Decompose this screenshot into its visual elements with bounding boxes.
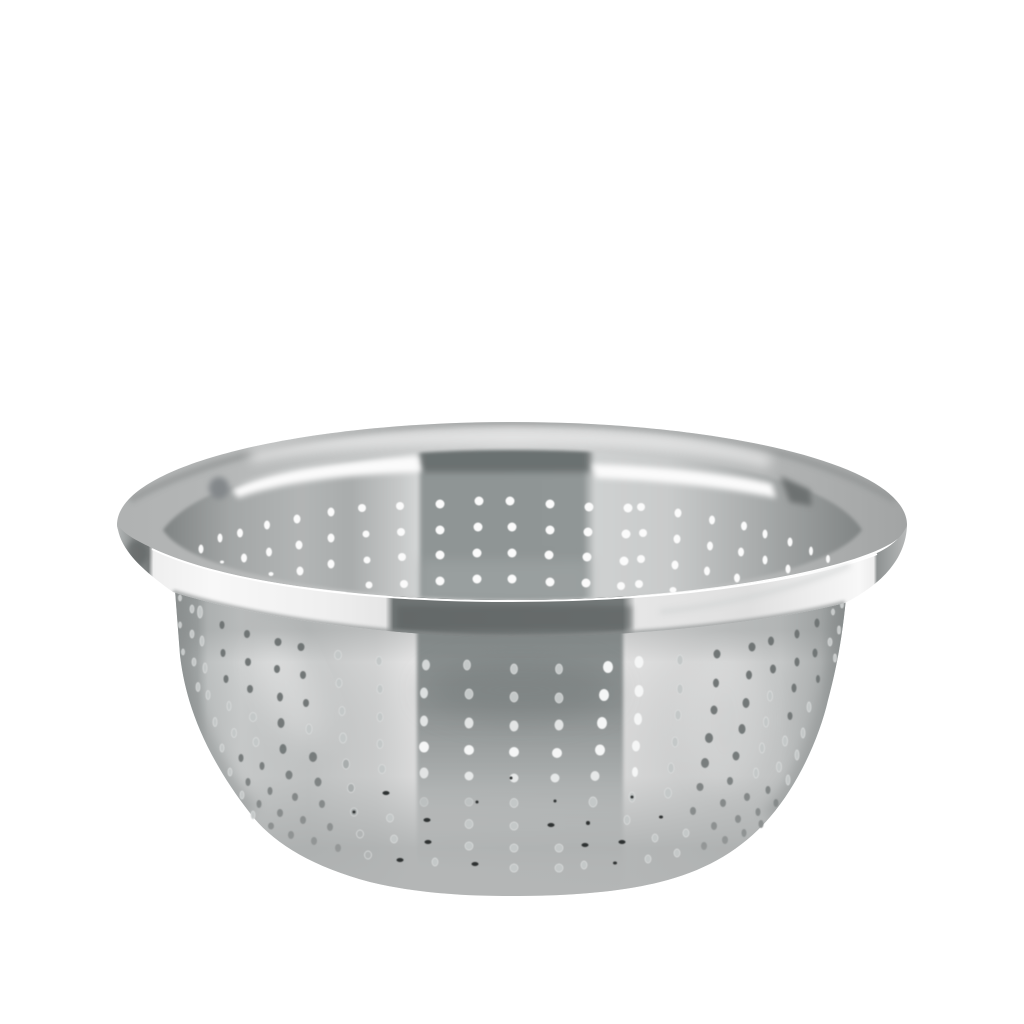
- front rim band: [117, 522, 907, 637]
- upper lip of the rim: [110, 418, 914, 608]
- interior perforations: [198, 496, 830, 593]
- body perforations: bright see-through holes: [419, 656, 644, 782]
- body perforations: dark see-through specks: [352, 776, 663, 866]
- product photo: stainless steel colander: [117, 422, 907, 896]
- basin interior: [155, 440, 870, 605]
- rim band reflections: [126, 539, 877, 637]
- lip highlights and shadows: [209, 456, 812, 506]
- bowl outer body: [170, 585, 850, 900]
- colander bowl: [110, 418, 914, 900]
- body perforations: pale holes: [178, 595, 844, 872]
- body perforations: dark holes: [220, 618, 820, 852]
